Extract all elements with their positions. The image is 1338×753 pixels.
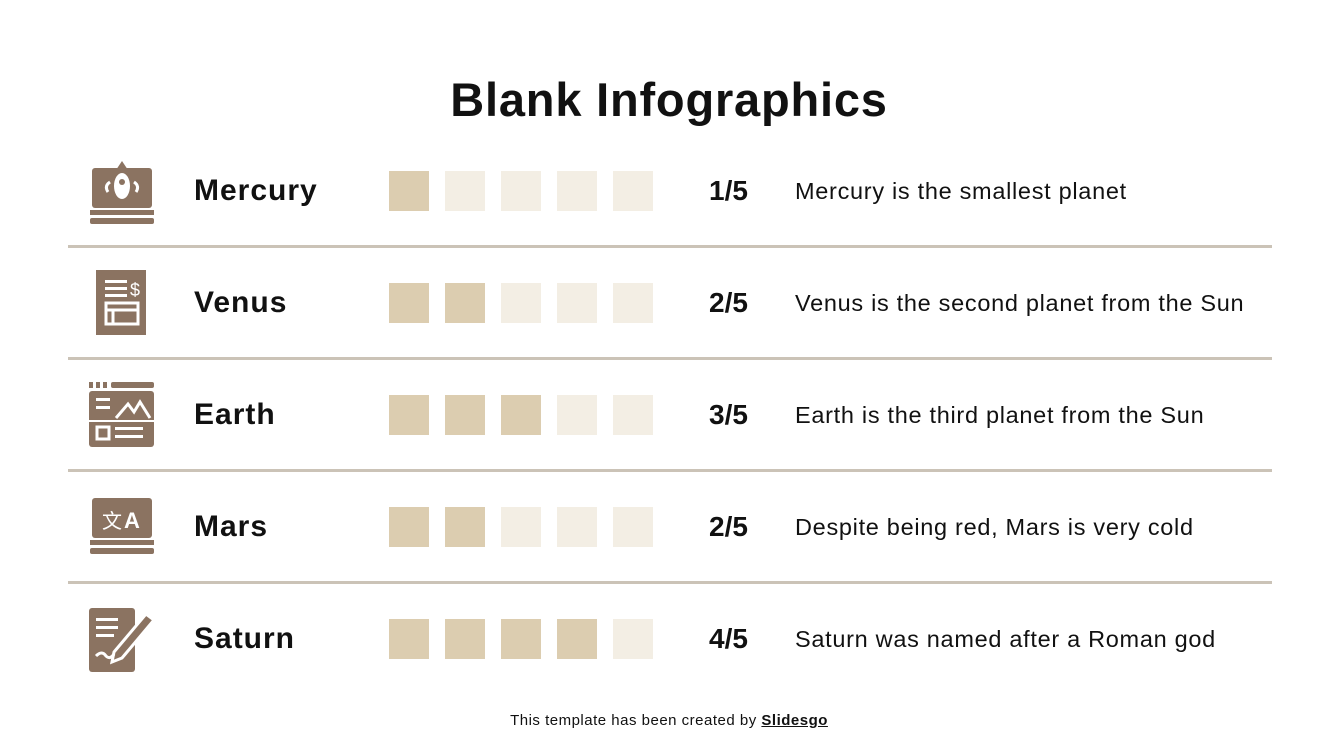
rating squares [389, 283, 653, 323]
score: 1/5 [709, 175, 748, 206]
label: Mars [194, 510, 268, 543]
description: Mercury is the smallest planet [795, 178, 1127, 204]
icon: translate laptop: A [124, 508, 140, 533]
score: 3/5 [709, 399, 748, 430]
row: Earth [89, 382, 1204, 447]
row: Mercury [90, 161, 1127, 224]
label: Venus [194, 286, 287, 319]
score: 4/5 [709, 623, 748, 654]
icon: webpage [89, 382, 154, 447]
label: Mercury [194, 174, 318, 207]
row: Saturn [89, 608, 1216, 672]
description: Venus is the second planet from the Sun [795, 290, 1244, 316]
score: 2/5 [709, 511, 748, 542]
icon: writing [89, 608, 152, 672]
icon: invoice [96, 270, 146, 335]
rating squares [389, 619, 653, 659]
icon: translate laptop [90, 498, 154, 554]
rating squares [389, 507, 653, 547]
row: Venus [96, 270, 1244, 335]
icon: laptop rocket [90, 161, 154, 224]
icon: translate laptop: 文 [102, 505, 122, 534]
title: Blank Infographics [450, 73, 888, 126]
score: 2/5 [709, 287, 748, 318]
description: Despite being red, Mars is very cold [795, 514, 1194, 540]
description: Saturn was named after a Roman god [795, 626, 1216, 652]
footer credit: This template has been created by Slidesgo [510, 712, 828, 729]
row: Mars [90, 498, 1194, 554]
label: Saturn [194, 622, 295, 655]
rating squares [389, 395, 653, 435]
icon: invoice: $ [130, 280, 140, 300]
description: Earth is the third planet from the Sun [795, 402, 1204, 428]
rating squares [389, 171, 653, 211]
label: Earth [194, 398, 276, 431]
